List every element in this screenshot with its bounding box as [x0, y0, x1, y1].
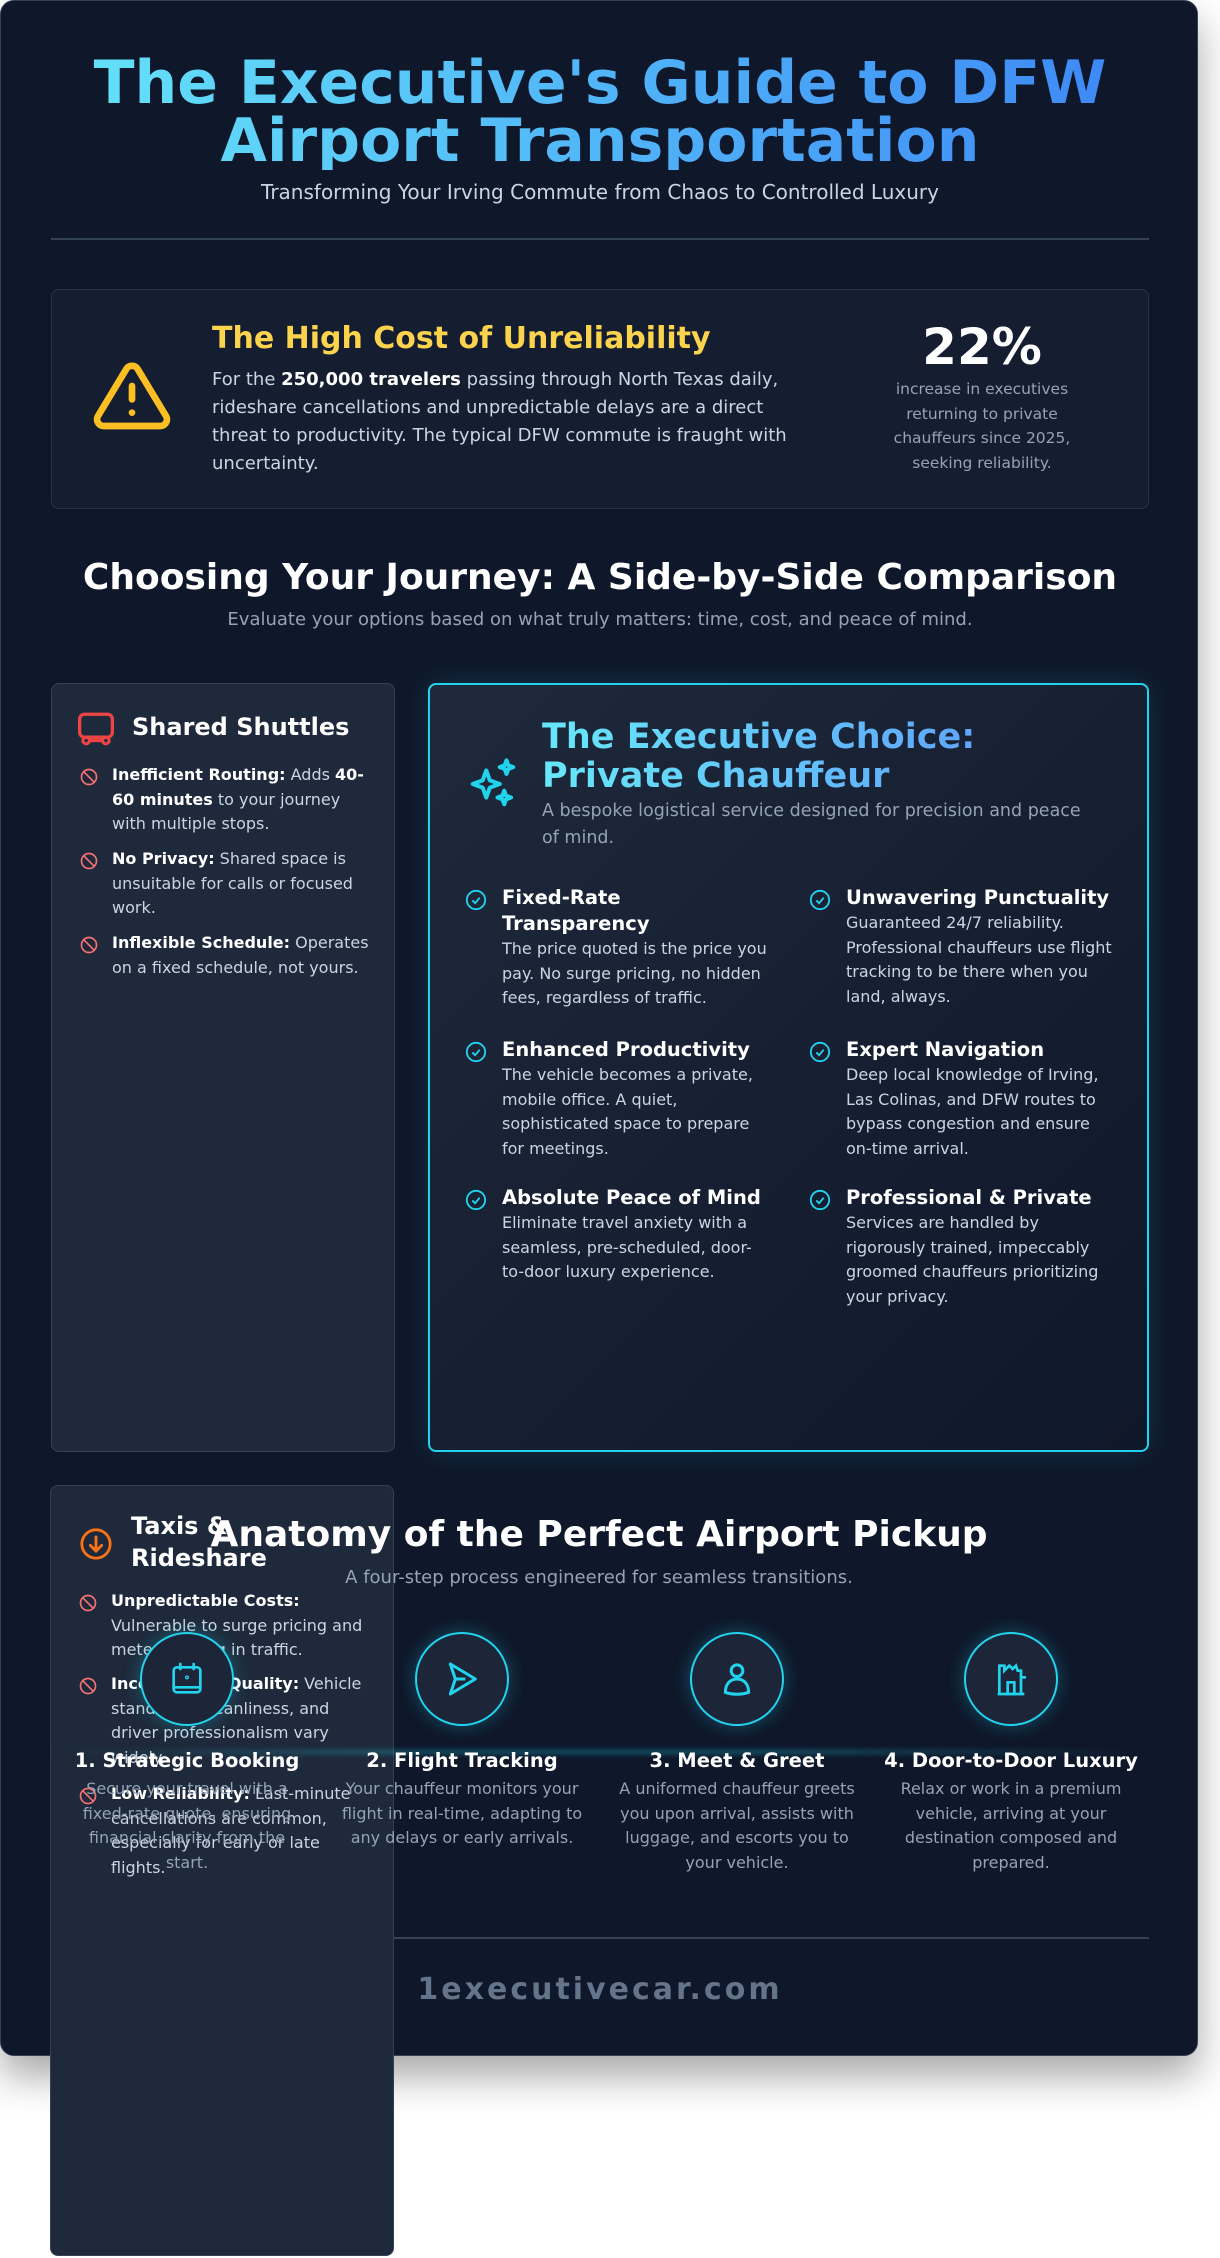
item: costs: Unpredictable Costs: Vulnerable to surge pricing and meter running in traffic.	[111, 1591, 362, 1659]
heading: The High Cost of Unreliability	[212, 321, 711, 356]
icon: house	[964, 1632, 1058, 1726]
feature: punctuality: Guaranteed 24/7 reliability. Professional chauffeurs use flight tracking to be there when you land, always.	[846, 913, 1112, 1006]
feature: professional: Services are handled by rigorously trained, impeccably groomed chauffeurs prioritizing your privacy.	[846, 1213, 1098, 1306]
step 2	[342, 1749, 582, 1847]
subtitle: A four-step process engineered for seamless transitions.	[345, 1567, 853, 1588]
icon: calendar	[140, 1632, 234, 1726]
heading: Anatomy of the Perfect Airport Pickup	[210, 1514, 988, 1555]
feature: professional	[810, 1186, 1098, 1306]
feature: navigation	[810, 1038, 1099, 1158]
body text: For the 250,000 travelers passing through North Texas daily, rideshare cancellations and unpredictable delays are a direct threat to productivity. The typical DFW commute is fraught with uncertainty.	[212, 369, 787, 474]
item: privacy: No Privacy: Shared space is unsuitable for calls or focused work.	[112, 849, 353, 917]
icon: orange arrow circle	[80, 1528, 112, 1560]
feature: professional: Professional & Private	[846, 1186, 1092, 1209]
heading: Shared Shuttles	[132, 713, 349, 741]
icon: paper plane	[415, 1632, 509, 1726]
step 3: A uniformed chauffeur greets you upon arrival, assists with luggage, and escorts you to your vehicle.	[619, 1779, 855, 1872]
step 4: Relax or work in a premium vehicle, arriving at your destination composed and prepared.	[901, 1779, 1121, 1872]
panel: taxis & rideshare	[50, 1485, 394, 2256]
heading: Taxis &	[131, 1512, 228, 1540]
feature: productivity: Enhanced Productivity	[502, 1038, 750, 1061]
step 4	[884, 1749, 1138, 1872]
step 2: Your chauffeur monitors your flight in real-time, adapting to any delays or early arrivals.	[342, 1779, 582, 1847]
subtitle: A bespoke logistical service designed for precision and peace of mind.	[542, 801, 1081, 848]
icon: bus	[78, 712, 114, 746]
footer: 1executivecar.com	[417, 1972, 783, 2007]
item: quality: Inconsistent Quality: Vehicle standards, cleanliness, and driver professionalism vary widely.	[111, 1674, 361, 1766]
heading: The Executive Choice:	[542, 717, 975, 757]
icon: warning	[94, 362, 170, 430]
panel: high cost of unreliability	[51, 289, 1149, 509]
stat: 22%: 22%	[922, 318, 1042, 376]
title	[1, 54, 1199, 170]
heading: comparison: Choosing Your Journey: A Side-by-Side Comparison	[83, 557, 1117, 598]
step 3: 3. Meet & Greet	[650, 1749, 824, 1772]
heading	[131, 1512, 267, 1572]
title: The Executive's Guide to DFW	[94, 48, 1106, 118]
feature: fixed-rate	[466, 886, 767, 1007]
step 2: 2. Flight Tracking	[366, 1749, 558, 1772]
icon: person	[690, 1632, 784, 1726]
heading: Rideshare	[131, 1544, 267, 1572]
item: schedule: Inflexible Schedule: Operates on a fixed schedule, not yours.	[112, 933, 369, 976]
panel: private chauffeur	[428, 683, 1149, 1452]
item: routing: Inefficient Routing: Adds 40-60 minutes to your journey with multiple stops.	[112, 765, 364, 833]
heading	[542, 718, 975, 796]
step 1: 1. Strategic Booking	[75, 1749, 299, 1772]
section: anatomy of the perfect pickup	[75, 1514, 1138, 1872]
feature: peace of mind	[466, 1186, 761, 1281]
feature: peace of mind: Absolute Peace of Mind	[502, 1186, 761, 1209]
step 1: Secure your travel with a fixed-rate quote, ensuring financial clarity from the start.	[83, 1779, 291, 1872]
feature: punctuality: Unwavering Punctuality	[846, 886, 1109, 909]
feature: punctuality	[810, 886, 1112, 1006]
icon: sparkles	[470, 758, 516, 806]
feature: productivity	[466, 1038, 753, 1158]
feature: productivity: The vehicle becomes a private, mobile office. A quiet, sophisticated space to prepare for meetings.	[502, 1065, 753, 1158]
comparison subtitle: Evaluate your options based on what truly matters: time, cost, and peace of mind.	[227, 609, 973, 630]
feature: navigation: Deep local knowledge of Irving, Las Colinas, and DFW routes to bypass congestion and ensure on-time arrival.	[846, 1065, 1099, 1158]
feature: fixed-rate: The price quoted is the price you pay. No surge pricing, no hidden fees, regardless of traffic.	[502, 939, 767, 1007]
step 4: 4. Door-to-Door Luxury	[884, 1749, 1138, 1772]
feature: peace of mind: Eliminate travel anxiety with a seamless, pre-scheduled, door-to-door luxury experience.	[502, 1213, 752, 1281]
subtitle: Transforming Your Irving Commute from Chaos to Controlled Luxury	[261, 180, 939, 204]
item: reliability: Low Reliability: Last-minute cancellations are common, especially for early or late flights.	[111, 1784, 350, 1876]
stat: 22%	[894, 318, 1070, 472]
stat: 22%: increase in executives returning to private chauffeurs since 2025, seeking reliability.	[894, 380, 1070, 472]
panel: shared shuttles	[51, 683, 395, 1452]
heading: Private Chauffeur	[542, 756, 889, 796]
feature: navigation: Expert Navigation	[846, 1038, 1044, 1061]
title: Airport Transportation	[221, 106, 979, 176]
feature: fixed-rate: Fixed-Rate Transparency	[502, 886, 650, 935]
